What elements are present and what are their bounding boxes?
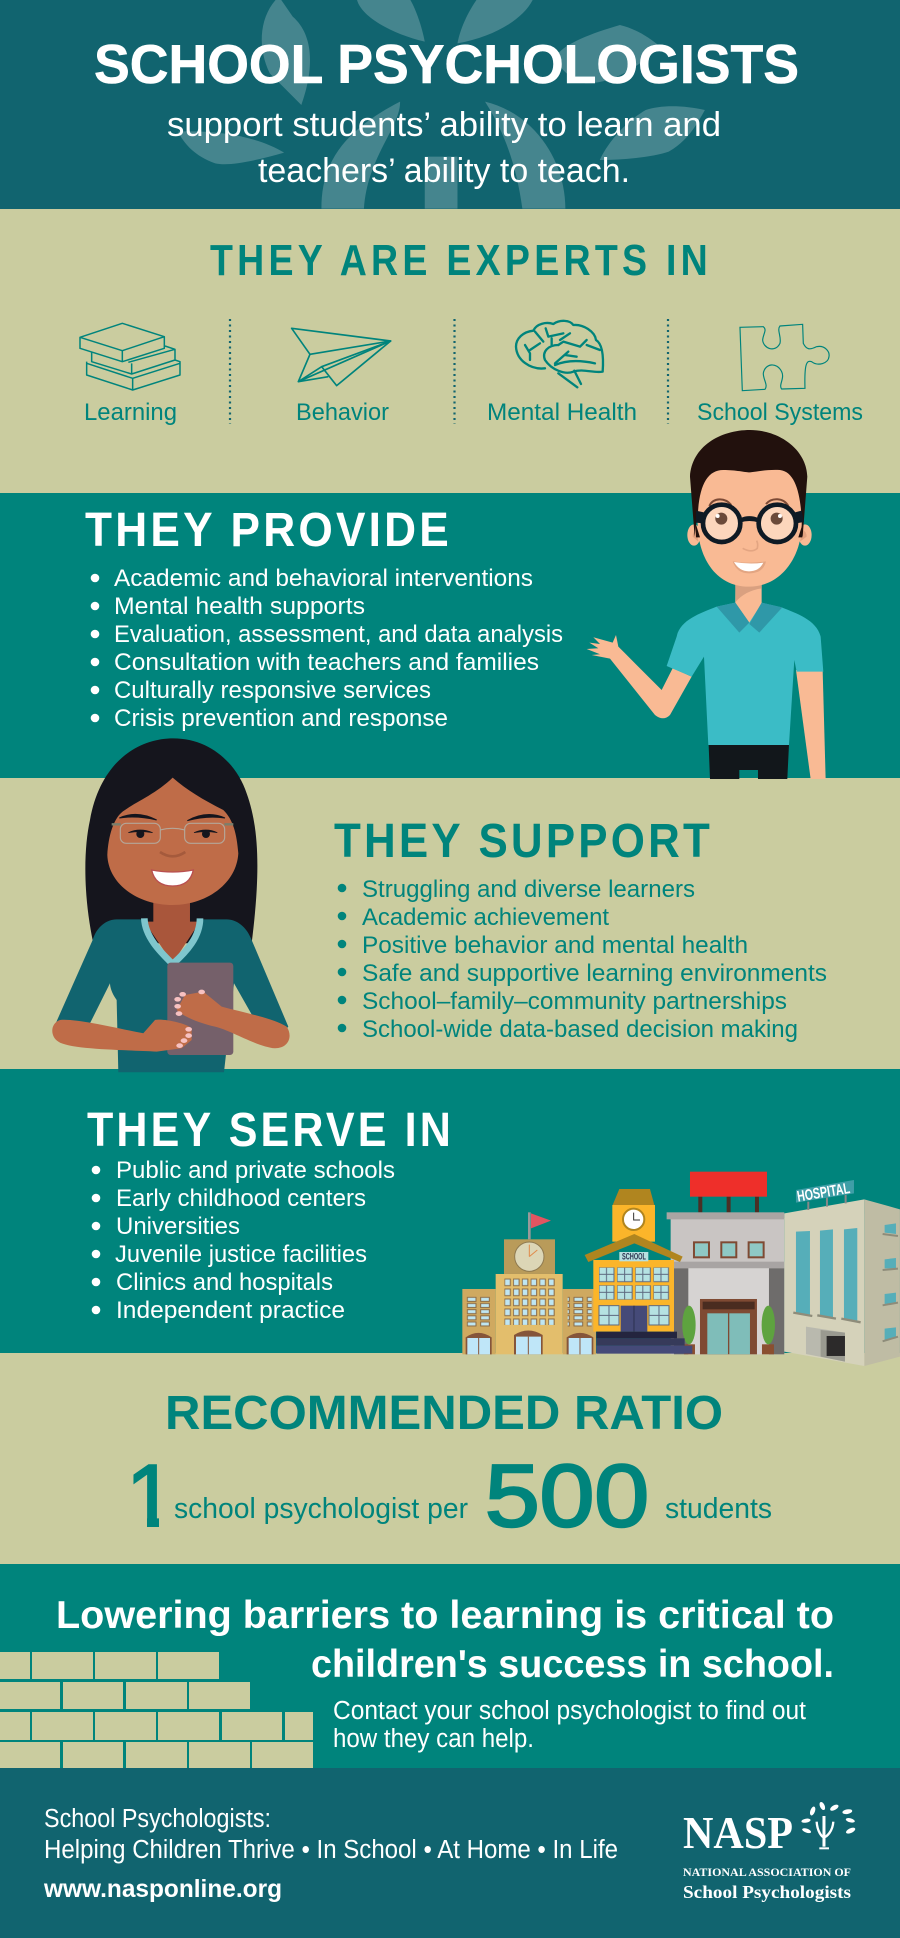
icon: brain — [516, 321, 603, 387]
illustration: school and hospital buildings — [462, 1172, 900, 1366]
building: university — [462, 1212, 596, 1354]
panel: they support — [0, 778, 900, 1069]
footer tagline — [44, 1805, 618, 1864]
building: yellow school — [585, 1189, 692, 1354]
list: services — [91, 565, 563, 732]
callout headline: children's success in school. — [311, 1643, 834, 1686]
contact text — [333, 1697, 806, 1753]
NASP logo: School Psychologists — [683, 1882, 851, 1902]
list: settings: Early childhood centers — [116, 1185, 366, 1212]
list: settings: Universities — [116, 1213, 240, 1240]
heading: they serve in: THEY SERVE IN — [87, 1104, 454, 1157]
panel: footer — [0, 1768, 900, 1938]
heading: they are experts in: THEY ARE EXPERTS IN — [210, 236, 712, 285]
list: services: Academic and behavioral interventions — [114, 565, 533, 592]
subtitle — [167, 106, 721, 190]
panel: lowering barriers — [0, 1564, 900, 1768]
panel: recommended ratio — [0, 1353, 900, 1564]
subtitle: support students’ ability to learn and — [167, 106, 721, 144]
list: services: Culturally responsive services — [114, 677, 431, 704]
list: settings — [92, 1157, 395, 1324]
illustration: male psychologist — [587, 430, 826, 779]
list: settings: Juvenile justice facilities — [115, 1241, 367, 1268]
panel: they provide — [0, 493, 900, 778]
contact text: how they can help. — [333, 1725, 534, 1753]
NASP logo: NATIONAL ASSOCIATION OF — [683, 1865, 851, 1879]
label: Mental Health: Mental Health — [487, 399, 637, 426]
ratio statement: 1 — [126, 1446, 175, 1545]
list: supports: School–family–community partnerships — [362, 988, 787, 1015]
building: gray office — [667, 1172, 784, 1354]
callout headline: Lowering barriers to learning is critical to — [56, 1594, 834, 1637]
heading: they support: THEY SUPPORT — [334, 815, 713, 868]
list: supports: Safe and supportive learning environments — [362, 960, 827, 987]
label: School Systems: School Systems — [697, 399, 863, 426]
list: services: Consultation with teachers and families — [114, 649, 539, 676]
ratio statement: students — [665, 1493, 772, 1525]
ratio statement — [126, 1446, 772, 1545]
list: services: Crisis prevention and response — [114, 705, 448, 732]
building: hospital — [784, 1180, 900, 1366]
NASP logo: NASP — [683, 1807, 793, 1858]
subtitle: teachers’ ability to teach. — [258, 152, 630, 190]
footer tagline: School Psychologists: — [44, 1805, 271, 1833]
building: yellow school: SCHOOL — [622, 1252, 646, 1262]
decorative tree watermark — [178, 0, 705, 209]
icon: puzzle piece — [740, 324, 829, 391]
heading: they provide: THEY PROVIDE — [85, 504, 452, 557]
list: supports — [338, 876, 827, 1043]
icon: paper plane — [292, 328, 391, 386]
contact text: Contact your school psychologist to find out — [333, 1697, 806, 1725]
callout headline — [56, 1594, 834, 1686]
icon: psi tree — [801, 1801, 856, 1848]
ratio statement: school psychologist per — [174, 1493, 468, 1525]
list: supports: Struggling and diverse learners — [362, 876, 695, 903]
list: services: Evaluation, assessment, and data analysis — [114, 621, 563, 648]
list: settings: Clinics and hospitals — [116, 1269, 333, 1296]
label: Behavior: Behavior — [296, 399, 389, 426]
icon: books — [80, 323, 180, 390]
panel: they serve in — [0, 1069, 900, 1353]
list: supports: Academic achievement — [362, 904, 609, 931]
brick wall — [0, 1652, 313, 1768]
title: SCHOOL PSYCHOLOGISTS — [94, 33, 799, 95]
list: settings: Independent practice — [116, 1297, 345, 1324]
building: hospital: HOSPITAL — [796, 1180, 851, 1206]
list: settings: Public and private schools — [116, 1157, 395, 1184]
list: supports: School-wide data-based decision making — [362, 1016, 798, 1043]
NASP logo — [683, 1801, 856, 1902]
heading: recommended ratio: RECOMMENDED RATIO — [165, 1387, 723, 1440]
panel: they are experts in — [0, 209, 900, 493]
illustration: female psychologist — [52, 738, 290, 1072]
dotted dividers — [230, 319, 668, 424]
label: Learning: Learning — [84, 399, 177, 426]
website: www.nasponline.org — [43, 1875, 282, 1903]
list: services: Mental health supports — [114, 593, 365, 620]
ratio statement: 500 — [485, 1446, 649, 1545]
footer tagline: Helping Children Thrive • In School • At Home • In Life — [44, 1836, 618, 1864]
list: supports: Positive behavior and mental health — [362, 932, 748, 959]
panel: header — [0, 0, 900, 209]
